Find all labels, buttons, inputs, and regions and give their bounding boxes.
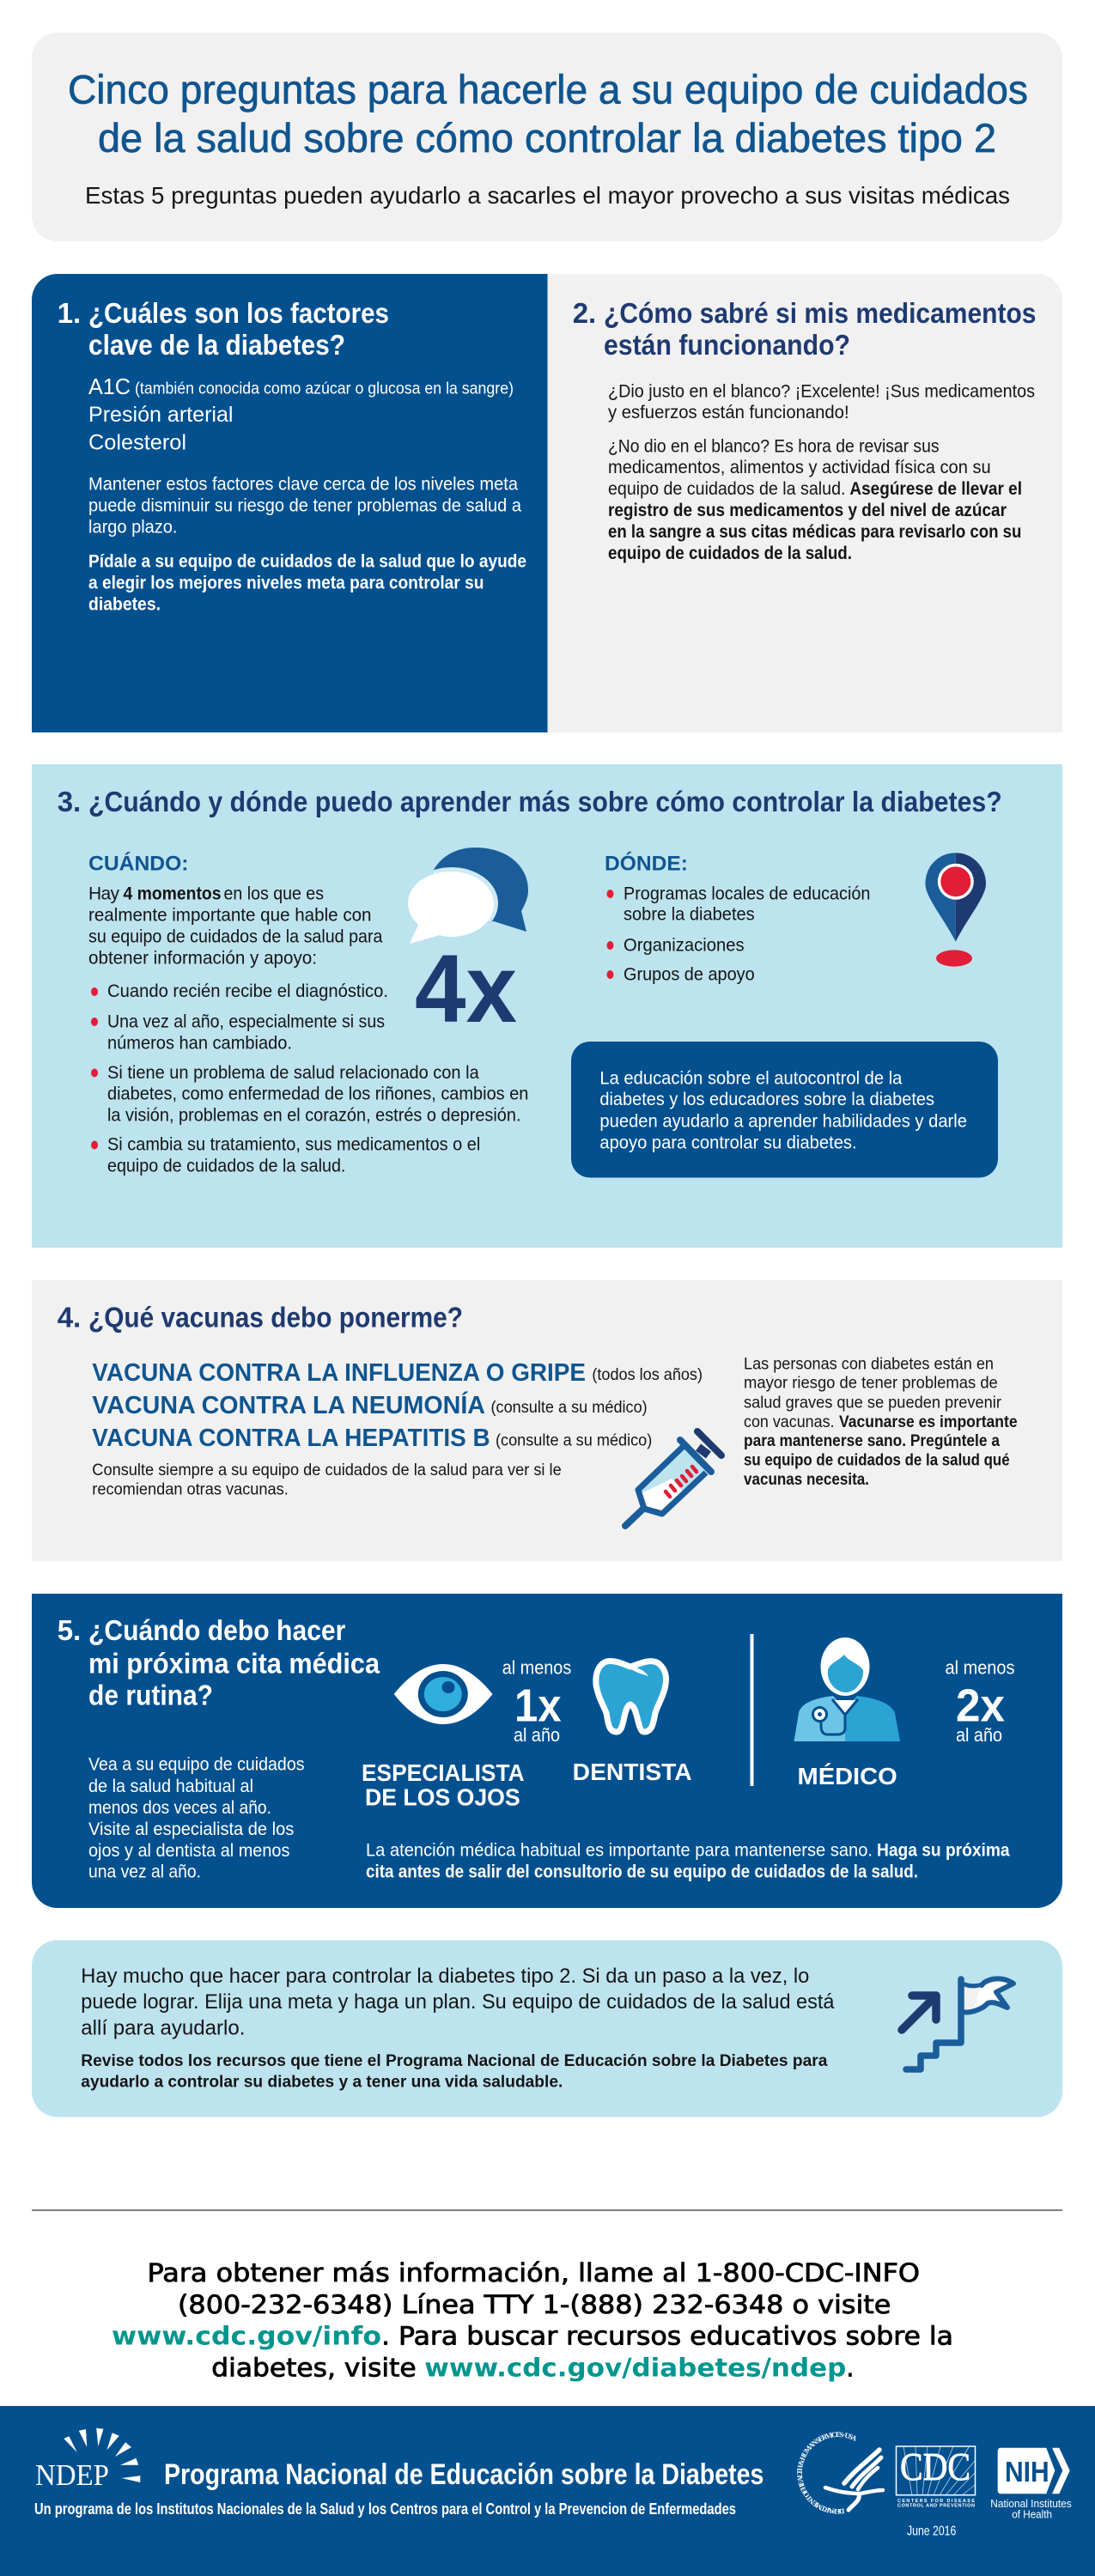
heading: question 1: clave de la diabetes? (88, 329, 345, 361)
logo: NDEP (35, 2428, 140, 2492)
logo: NIH: NIH (1005, 2456, 1049, 2488)
list of key factors: A1C (88, 374, 131, 399)
publication date: June 2016 (907, 2524, 956, 2539)
text block: why vaccines matter: Vacunarse es importante (839, 1413, 1018, 1431)
contact information: (800-232-6348) Línea TTY 1-(888) 232-6348 o visite (178, 2290, 891, 2319)
panel: question 2 (548, 274, 1062, 732)
bullet list: when: Si tiene un problema de salud relacionado con la (107, 1063, 479, 1083)
stat: once a year (502, 1656, 571, 1746)
callout: self-management education: diabetes y los educadores sobre la diabetes (599, 1090, 934, 1109)
text block: why vaccines matter: vacunas necesita. (744, 1470, 869, 1489)
program tagline: Un programa de los Institutos Nacionales de la Salud y los Centros para el Control y la Prevencion de Enfermedades (34, 2500, 736, 2518)
stat: twice a year: al año (956, 1724, 1002, 1746)
text block: bold advice: Pídale a su equipo de cuidados de la salud que lo ayude (88, 551, 526, 572)
logo: CDC: CENTERS FOR DISEASE (897, 2499, 975, 2504)
heading: question 1 (58, 297, 389, 361)
heading: question 2: ¿Cómo sabré si mis medicamentos (604, 297, 1036, 329)
callout: self-management education: apoyo para controlar su diabetes. (599, 1133, 857, 1153)
heading: question 4: ¿Qué vacunas debo ponerme? (88, 1301, 463, 1333)
list of key factors (88, 374, 514, 455)
contact information: Para obtener más información, llame al 1-800-CDC-INFO (148, 2258, 920, 2287)
panel: question 5 (32, 1594, 1062, 1908)
logo: NIH: of Health (1012, 2509, 1052, 2521)
heading: question 3: ¿Cuándo y dónde puedo aprender más sobre cómo controlar la diabetes? (88, 786, 1002, 817)
logo: CDC: CONTROL AND PREVENTION (897, 2504, 975, 2509)
heading: question 1: 1. (58, 297, 81, 329)
heading: question 1: ¿Cuáles son los factores (88, 297, 389, 329)
text block: key factors explanation: puede disminuir su riesgo de tener problemas de salud a (88, 495, 521, 515)
callout: self-management education: La educación sobre el autocontrol de la (599, 1069, 903, 1089)
text block: when intro: su equipo de cuidados de la salud para (88, 927, 383, 946)
logo: NDEP: NDEP (35, 2458, 109, 2492)
bullet list: where: Organizaciones (624, 936, 745, 956)
stat: twice a year (945, 1656, 1015, 1746)
text block: visit frequency: una vez al año. (88, 1862, 201, 1882)
bullet list: when: la visión, problemas en el corazón, estrés o depresión. (107, 1106, 520, 1126)
subheading: when: CUÁNDO: (88, 852, 189, 876)
title: de la salud sobre cómo controlar la diabetes tipo 2 (98, 115, 996, 161)
label: eye specialist: ESPECIALISTA (362, 1759, 525, 1786)
panel: closing message (32, 1941, 1062, 2117)
text block: off target: en la sangre a sus citas médicas para revisarlo con su (608, 522, 1021, 542)
vaccine list: (consulte a su médico) (491, 1398, 648, 1417)
label: eye specialist (362, 1759, 525, 1810)
heading: question 2: 2. (573, 297, 596, 329)
text block: off target: equipo de cuidados de la salud. (608, 544, 852, 563)
logo: NIH (990, 2448, 1072, 2521)
icon: syringe (625, 1431, 721, 1526)
bullet list: when: equipo de cuidados de la salud. (107, 1156, 345, 1176)
bullet list: where (606, 884, 870, 985)
bullet list: when: Si cambia su tratamiento, sus medicamentos o el (107, 1135, 480, 1155)
text block: review resources (81, 2051, 828, 2092)
text block: when intro: 4 momentos (124, 884, 222, 904)
bullet list: when: diabetes, como enfermedad de los riñones, cambios en (107, 1084, 528, 1104)
icon: doctor (794, 1637, 900, 1741)
text block: key factors explanation: Mantener estos factores clave cerca de los niveles meta (88, 475, 518, 495)
text block: consult team: Consulte siempre a su equipo de cuidados de la salud para ver si le (92, 1461, 562, 1479)
vaccine list: VACUNA CONTRA LA NEUMONÍA (92, 1392, 485, 1419)
bullet list: where: Grupos de apoyo (624, 965, 755, 985)
text block: off target: ¿No dio en el blanco? Es hora de revisar sus (608, 436, 940, 456)
text block: when intro (88, 884, 383, 969)
icon: speech bubbles (405, 848, 528, 944)
label: dentist: DENTISTA (573, 1759, 692, 1785)
text block: off target: registro de sus medicamentos y del nivel de azúcar (608, 501, 1007, 520)
text block: why vaccines matter: con vacunas. (744, 1413, 835, 1431)
text block: review resources: ayudarlo a controlar su diabetes y a tener una vida saludable. (81, 2073, 563, 2092)
bullet list: when: Cuando recién recibe el diagnóstico. (107, 981, 388, 1001)
text block: visit frequency (88, 1755, 304, 1882)
contact information: diabetes, visite (211, 2353, 417, 2382)
heading: question 5: 5. (58, 1614, 81, 1646)
text block: closing message: puede lograr. Elija una meta y haga un plan. Su equipo de cuidados de la salud está (81, 1990, 835, 2014)
vaccine list: (consulte a su médico) (496, 1431, 652, 1449)
bullet list: when (91, 981, 528, 1176)
contact information: . (846, 2353, 855, 2382)
text block: closing message (81, 1965, 835, 2039)
text block: when intro: en los que es (223, 884, 324, 904)
bullet list: where: Programas locales de educación (624, 884, 870, 903)
title (68, 67, 1028, 161)
heading: question 3: 3. (58, 786, 81, 817)
panel: question 3 (32, 764, 1062, 1248)
text block: visit frequency: ojos y al dentista al menos (88, 1841, 289, 1861)
icon: tooth (596, 1662, 666, 1732)
text block: why vaccines matter: mayor riesgo de tener problemas de (744, 1374, 998, 1393)
contact information: www.cdc.gov/diabetes/ndep (424, 2353, 846, 2382)
text block: why vaccines matter: salud graves que se pueden prevenir (744, 1393, 1001, 1412)
callout: self-management education (571, 1042, 998, 1178)
heading: question 2: están funcionando? (604, 329, 850, 361)
text block: key factors explanation: largo plazo. (88, 518, 177, 538)
text block: on target: y esfuerzos están funcionando! (608, 403, 849, 422)
vaccine list: VACUNA CONTRA LA HEPATITIS B (92, 1425, 490, 1452)
panel: question 1 (32, 274, 548, 732)
vaccine list (92, 1359, 703, 1452)
stat: twice a year: 2x (956, 1680, 1005, 1731)
text block: when intro: Hay (88, 884, 120, 904)
title: Cinco preguntas para hacerle a su equipo de cuidados (68, 67, 1028, 112)
icon: eye (394, 1664, 493, 1724)
text block: visit frequency: de la salud habitual al (88, 1777, 253, 1796)
text block: visit frequency: menos dos veces al año. (88, 1798, 271, 1818)
text block: on target: ¿Dio justo en el blanco? ¡Excelente! ¡Sus medicamentos (608, 381, 1035, 401)
bullet list: where: sobre la diabetes (624, 905, 755, 925)
list of key factors: (también conocida como azúcar o glucosa en la sangre) (135, 380, 514, 398)
text block: off target: Asegúrese de llevar el (849, 479, 1022, 499)
callout: self-management education: pueden ayudarlo a aprender habilidades y darle (599, 1111, 967, 1131)
contact information (112, 2258, 953, 2382)
text block: closing message: allí para ayudarlo. (81, 2016, 245, 2039)
text block: bold advice: diabetes. (88, 594, 161, 614)
subheading: where: DÓNDE: (605, 851, 688, 875)
logo: CDC (897, 2445, 976, 2509)
text block: off target: equipo de cuidados de la salud. (608, 479, 845, 499)
contact information: . Para buscar recursos educativos sobre la (381, 2322, 953, 2351)
text block: consult team: recomiendan otras vacunas. (92, 1479, 289, 1498)
text block: why vaccines matter: para mantenerse sano. Pregúntele a (744, 1431, 1000, 1450)
panel: question 4 (32, 1280, 1062, 1561)
icon: location pin (925, 853, 986, 967)
footer band (0, 2406, 1095, 2576)
vaccine list: (todos los años) (592, 1365, 703, 1384)
stat: once a year: al año (514, 1724, 560, 1746)
text block: regular care: La atención médica habitual es importante para mantenerse sano. (366, 1841, 873, 1860)
label: doctor: MÉDICO (797, 1763, 897, 1789)
heading: question 4: 4. (58, 1301, 81, 1333)
subtitle: Estas 5 preguntas pueden ayudarlo a sacarles el mayor provecho a sus visitas médicas (85, 182, 1010, 209)
text block: bold advice: a elegir los mejores niveles meta para controlar su (88, 574, 484, 593)
text block: visit frequency: Visite al especialista de los (88, 1820, 294, 1839)
text block: regular care (366, 1841, 1010, 1882)
text block: key factors explanation (88, 475, 521, 538)
logo: HHS: DEPARTMENT OF HEALTH & HUMAN SERVICES · USA (797, 2432, 855, 2514)
text block: regular care: Haga su próxima (877, 1841, 1010, 1860)
text block: visit frequency: Vea a su equipo de cuidados (88, 1755, 304, 1775)
heading: question 5: ¿Cuándo debo hacer (88, 1614, 346, 1646)
heading: question 5: de rutina? (88, 1680, 213, 1711)
icon: stairs, arrow and flag (902, 1978, 1013, 2069)
text block: why vaccines matter: su equipo de cuidados de la salud qué (744, 1450, 1010, 1469)
contact information: www.cdc.gov/info (112, 2322, 381, 2351)
text block: consult team (92, 1461, 562, 1498)
logo: NIH: National Institutes (990, 2498, 1072, 2510)
text block: why vaccines matter (744, 1354, 1018, 1489)
vaccine list: VACUNA CONTRA LA INFLUENZA O GRIPE (92, 1359, 586, 1387)
heading: question 5 (58, 1614, 380, 1711)
stat: twice a year: al menos (945, 1656, 1015, 1678)
list of key factors: Presión arterial (88, 403, 234, 427)
stat: once a year: 1x (514, 1680, 562, 1731)
bullet list: when: Una vez al año, especialmente si sus (107, 1012, 385, 1032)
heading: question 2 (573, 297, 1036, 361)
list of key factors: Colesterol (88, 431, 186, 455)
text block: off target: medicamentos, alimentos y actividad física con su (608, 458, 991, 477)
text block: bold advice (88, 551, 526, 614)
text block: on target (608, 381, 1035, 422)
text block: regular care: cita antes de salir del consultorio de su equipo de cuidados de la salud. (366, 1862, 918, 1882)
stat: once a year: al menos (502, 1656, 571, 1678)
text block: when intro: realmente importante que hable con (88, 905, 371, 926)
text block: off target (608, 436, 1022, 563)
text block: closing message: Hay mucho que hacer para controlar la diabetes tipo 2. Si da un paso a la vez, lo (81, 1965, 809, 1988)
logo: CDC: CDC (900, 2445, 970, 2488)
big number 4x: 4x (415, 935, 517, 1042)
header panel (32, 33, 1062, 241)
text block: when intro: obtener información y apoyo: (88, 949, 317, 969)
text block: why vaccines matter: Las personas con diabetes están en (744, 1354, 994, 1373)
program name: Programa Nacional de Educación sobre la Diabetes (164, 2458, 763, 2491)
bullet list: when: números han cambiado. (107, 1033, 292, 1053)
heading: question 5: mi próxima cita médica (88, 1648, 380, 1680)
text block: review resources: Revise todos los recursos que tiene el Programa Nacional de Educación sobre la Diabetes para (81, 2051, 828, 2070)
label: eye specialist: DE LOS OJOS (365, 1783, 520, 1810)
logo: HHS (797, 2432, 885, 2514)
